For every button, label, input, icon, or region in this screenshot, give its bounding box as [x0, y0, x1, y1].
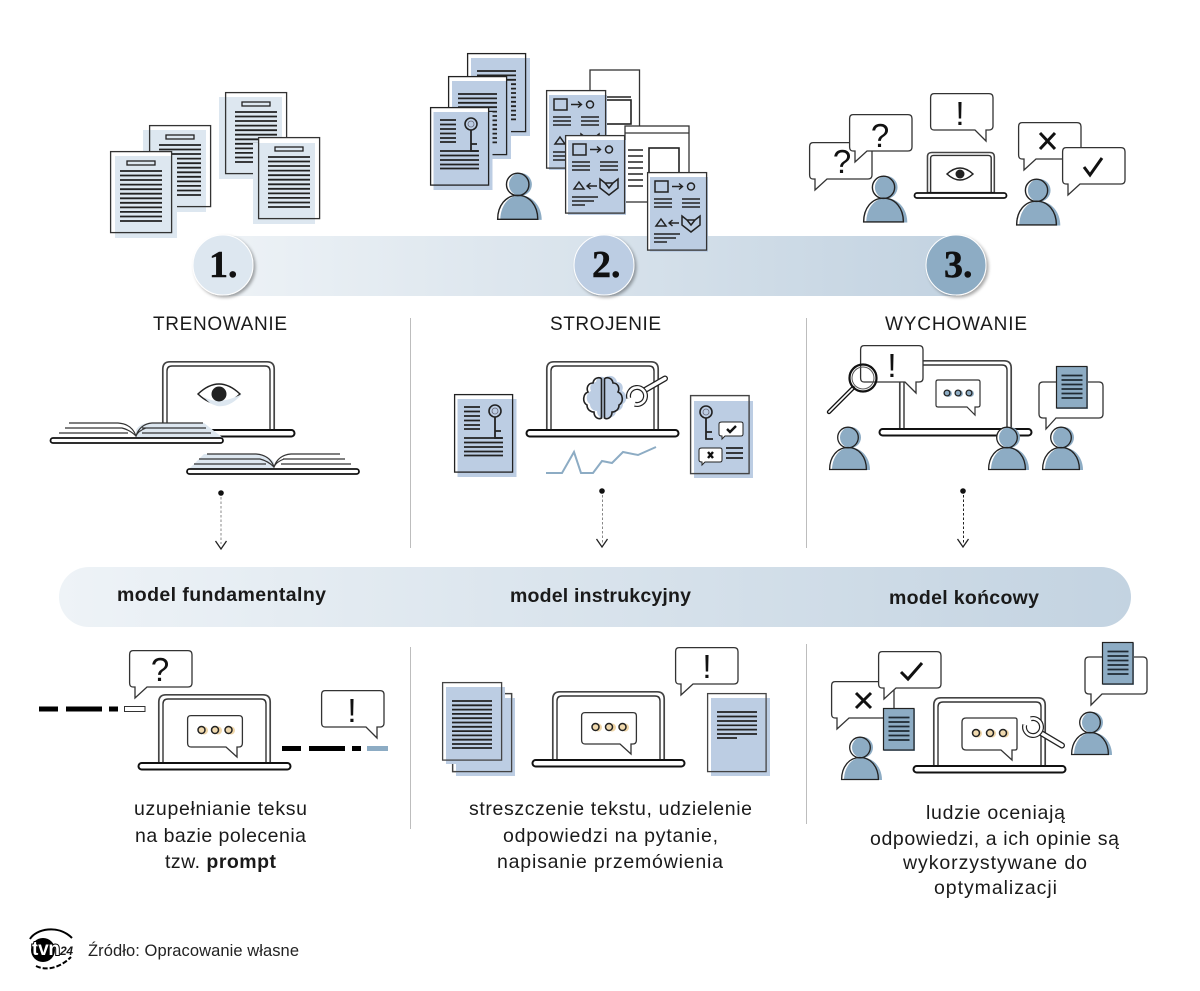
step 2 circle: 2. [592, 244, 620, 286]
step 3 circle: 3. [944, 244, 972, 286]
illustration: key documents and person [430, 53, 542, 220]
arrow: upbringing to final model [958, 488, 968, 547]
illustration: prompt completion laptop [39, 651, 388, 770]
step 3 circle [926, 235, 986, 295]
arrow: tuning to instruction model [596, 488, 608, 547]
arrow: training to foundation model [216, 490, 226, 549]
heading: strojenie: STROJENIE [550, 314, 661, 335]
label: model fundamentalny: model fundamentalny [117, 584, 326, 606]
top gradient bar [223, 236, 956, 296]
text: instruction model description: odpowiedzi na pytanie, [503, 825, 718, 847]
text: final model description [870, 802, 1119, 899]
illustration: people, chat bubbles and laptop: ! [955, 95, 965, 132]
illustration: people, chat bubbles and laptop: ? [871, 117, 889, 154]
heading: wychowanie: WYCHOWANIE [885, 314, 1027, 335]
step 1 circle [193, 235, 253, 295]
text: instruction model description [469, 798, 752, 873]
text: final model description: wykorzystywane do [902, 852, 1087, 874]
text: final model description: optymalizacji [934, 877, 1057, 899]
model gradient bar [59, 567, 1131, 627]
illustration: summarising documents and laptop [442, 648, 770, 776]
illustration: instruction documents [546, 70, 708, 252]
label: model instrukcyjny: model instrukcyjny [510, 585, 691, 607]
text: prompt description: uzupełnianie teksu [134, 798, 307, 820]
text: final model description: odpowiedzi, a ich opinie są [870, 828, 1119, 850]
text: prompt description: tzw. prompt [165, 851, 276, 873]
label: model końcowy: model końcowy [889, 587, 1039, 609]
source note: Źródło: Opracowanie własne [88, 941, 299, 960]
logo: tvn24: tvn [32, 939, 60, 960]
text: prompt description [134, 798, 307, 873]
illustration: people, chat bubbles and laptop: ? [833, 143, 851, 180]
illustration: prompt completion laptop: ? [151, 651, 169, 688]
heading: trenowanie: TRENOWANIE [153, 314, 287, 335]
illustration: laptop with brain, wrench, key documents and chart [454, 362, 753, 478]
illustration: people, chat bubbles and laptop [810, 94, 1125, 225]
illustration: laptop with eye and open books [50, 362, 359, 474]
illustration: laptop with reviewers and bubbles [829, 346, 1103, 470]
logo: tvn24: 24 [59, 944, 73, 958]
step 2 circle [574, 235, 634, 295]
text: instruction model description: streszczenie tekstu, udzielenie [469, 798, 752, 820]
step 1 circle: 1. [209, 244, 238, 286]
illustration: stacks of documents [110, 92, 320, 238]
logo: tvn24 [30, 929, 73, 968]
text: instruction model description: napisanie przemówienia [497, 851, 723, 873]
illustration: prompt completion laptop: ! [347, 692, 357, 729]
illustration: laptop with reviewers and bubbles: ! [887, 347, 897, 384]
text: prompt description: na bazie polecenia [135, 825, 306, 847]
illustration: summarising documents and laptop: ! [702, 648, 712, 685]
text: final model description: ludzie oceniają [926, 802, 1065, 824]
illustration: people rating answers and laptop with wrench [832, 642, 1147, 780]
